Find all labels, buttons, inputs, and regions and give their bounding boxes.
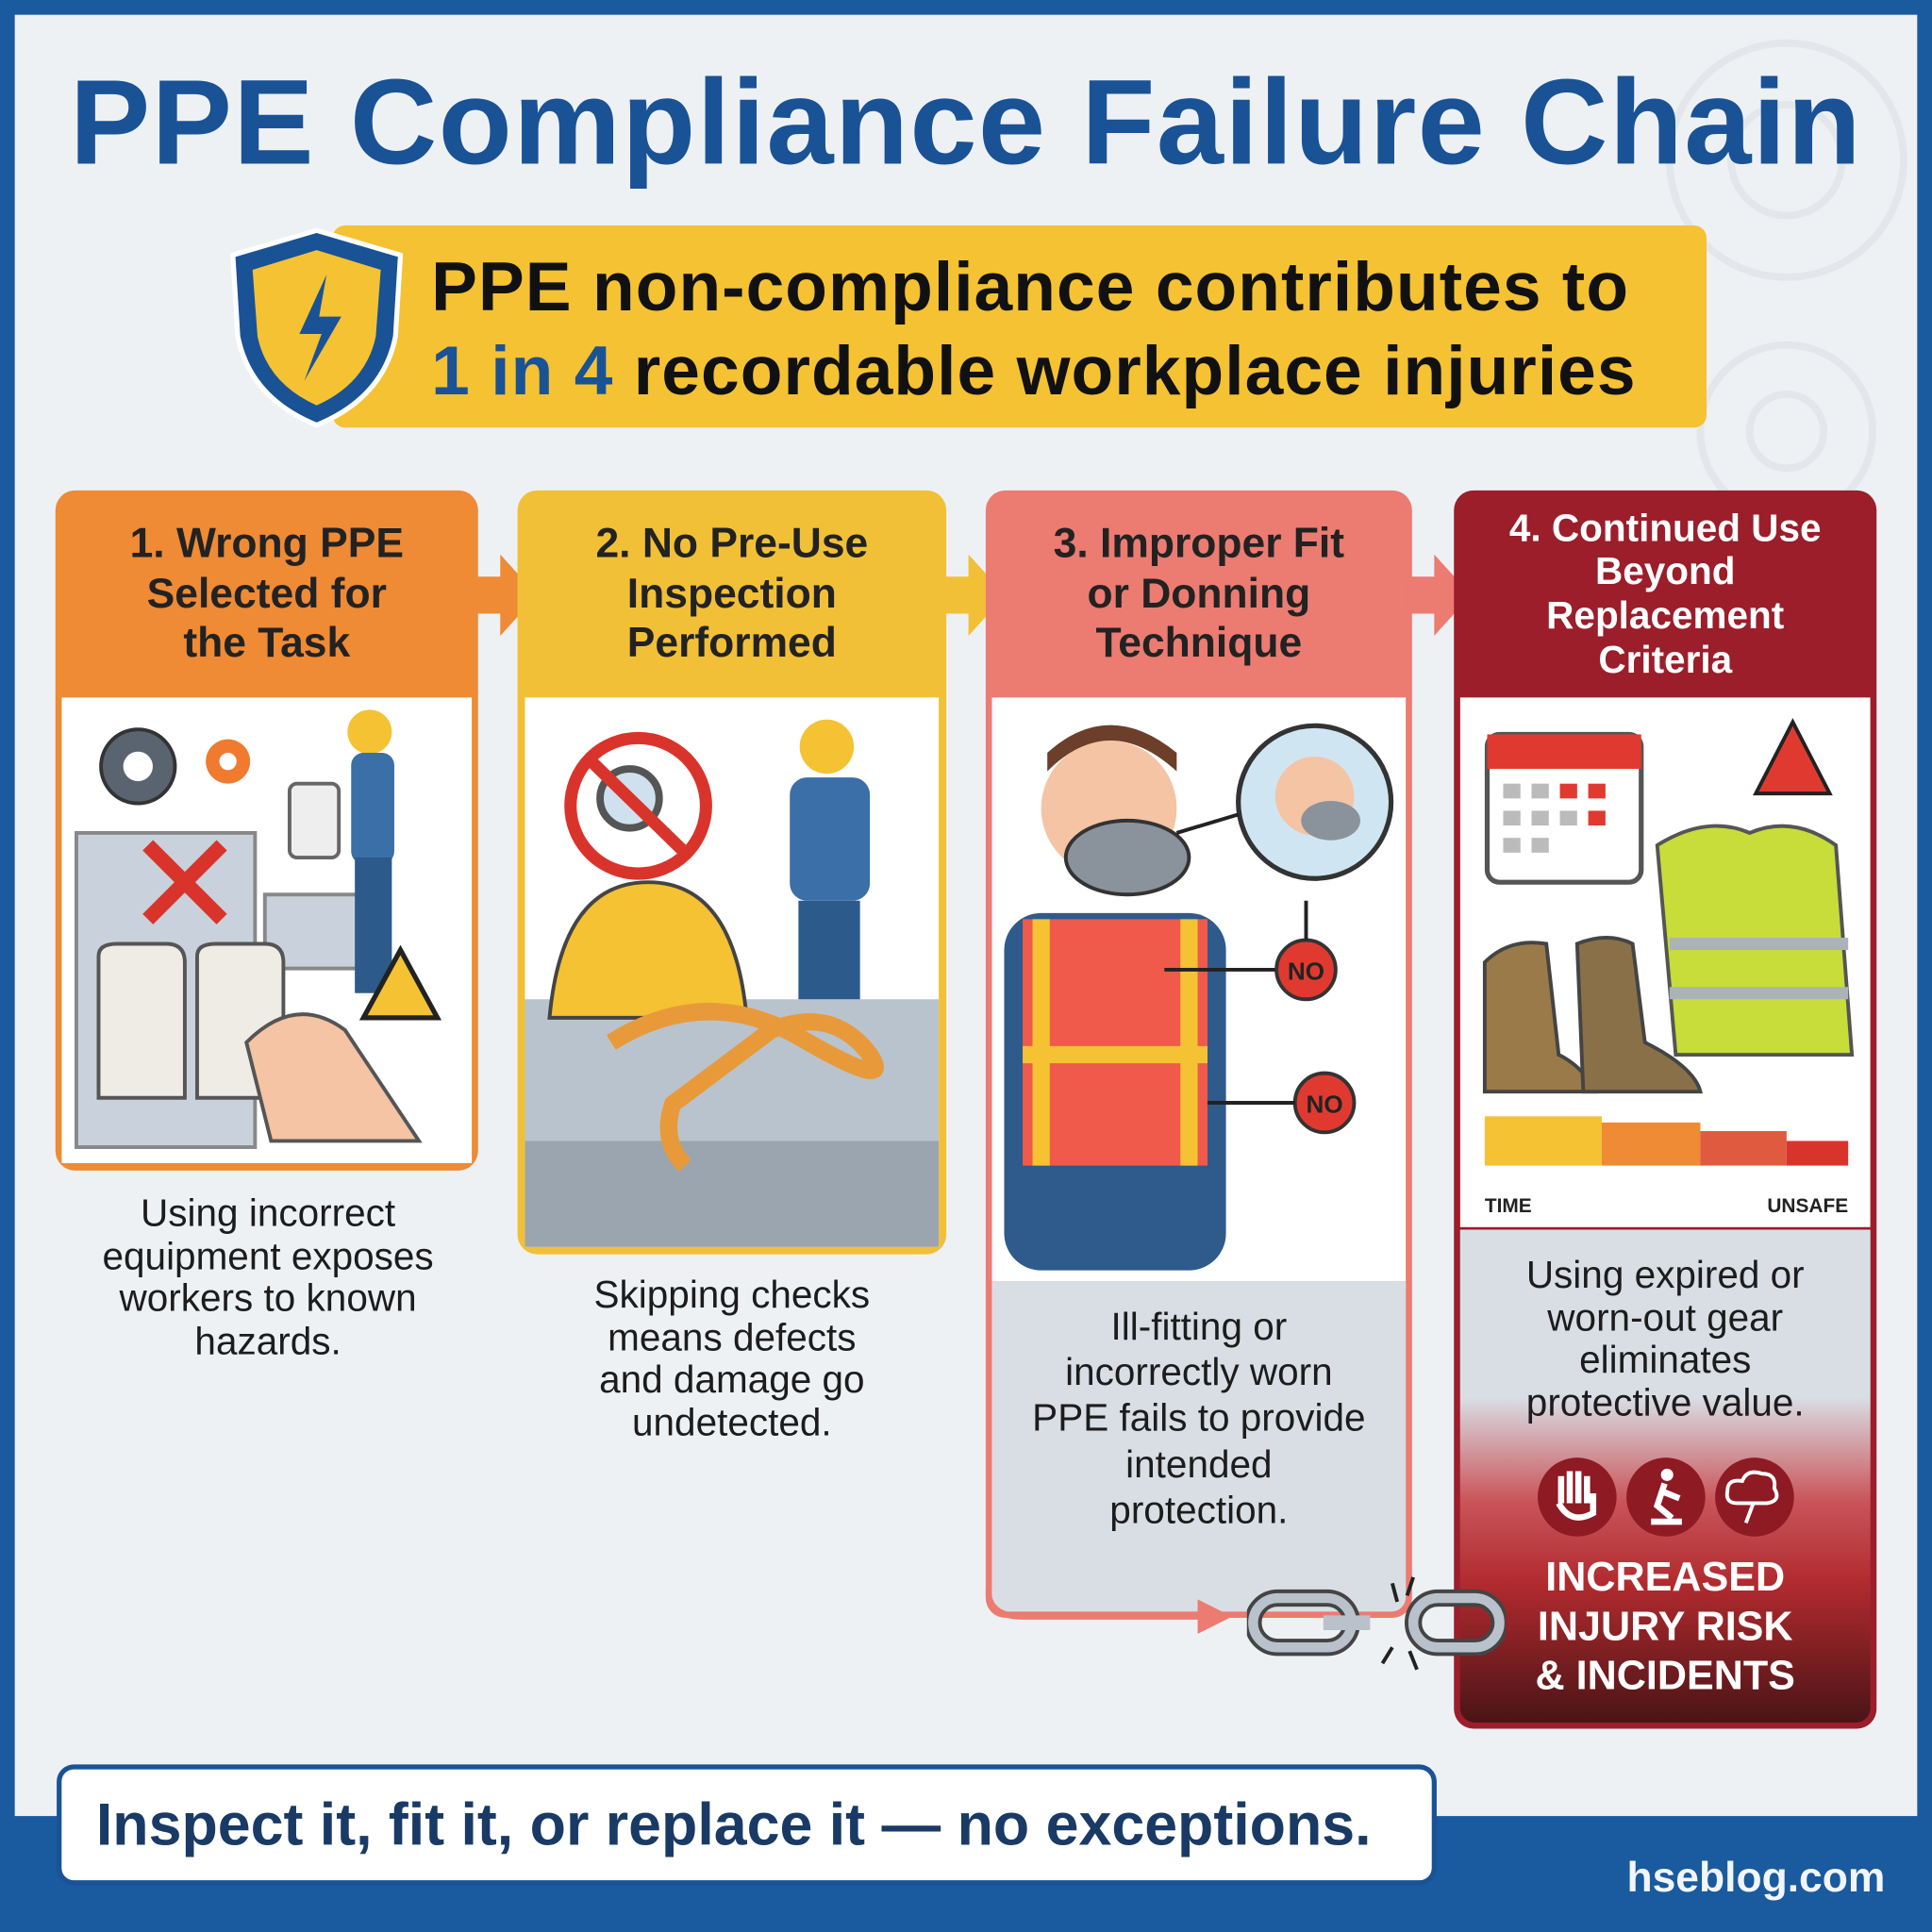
heading 2: Performed (627, 620, 837, 667)
text 3: incorrectly worn (1065, 1351, 1333, 1393)
stat text (431, 248, 1637, 409)
heading 1 (130, 520, 404, 667)
heading 3: 3. Improper Fit (1054, 520, 1344, 567)
text 1: hazards. (194, 1320, 341, 1363)
callout: increased injury risk (1536, 1554, 1795, 1698)
footer band (0, 1816, 1932, 1932)
text 2: means defects (608, 1316, 856, 1358)
heading 1: 1. Wrong PPE (130, 520, 404, 567)
text 1: Using incorrect (141, 1191, 395, 1235)
text 2: and damage go (599, 1358, 865, 1402)
stat text: 1 in 4 recordable workplace injuries (431, 331, 1637, 409)
decorative gears (1666, 40, 1907, 491)
heading 1: the Task (183, 620, 350, 667)
arrow 1 (477, 555, 518, 636)
icon: broken chain (1247, 1576, 1506, 1670)
text 4: protective value. (1526, 1381, 1805, 1424)
heading 4: Beyond (1595, 550, 1735, 593)
text 3: intended (1125, 1442, 1273, 1486)
text 1 (103, 1191, 434, 1363)
brand: hseblog.com (1626, 1855, 1885, 1901)
callout: increased injury risk: & INCIDENTS (1536, 1653, 1795, 1698)
title: PPE Compliance Failure Chain (70, 54, 1862, 190)
text 3: protection. (1109, 1488, 1288, 1531)
text 4: eliminates (1579, 1339, 1751, 1382)
illustration 2 (525, 697, 940, 1247)
panel 2 (517, 491, 947, 1255)
stat text: PPE non-compliance contributes to (431, 248, 1629, 325)
callout: increased injury risk: INJURY RISK (1538, 1603, 1793, 1649)
stat banner (230, 225, 1707, 428)
arrow: to chain (985, 1590, 1230, 1634)
arrow 2 (946, 555, 986, 636)
panel 3 (985, 491, 1412, 1618)
heading 1: Selected for (147, 570, 387, 617)
illustration 4: UNSAFE (1767, 1195, 1848, 1217)
heading 4: 4. Continued Use (1509, 506, 1822, 549)
icons: hazards (1538, 1457, 1794, 1537)
text 4: worn-out gear (1547, 1296, 1783, 1339)
text 1: equipment exposes (103, 1234, 434, 1277)
icon: shield (230, 228, 404, 427)
heading 2: Inspection (627, 570, 837, 617)
heading 4 (1509, 506, 1822, 681)
illustration 4 (1460, 697, 1871, 1227)
illustration 3 (992, 697, 1406, 1281)
text 3 (1032, 1305, 1366, 1531)
callout: increased injury risk: INCREASED (1545, 1554, 1785, 1599)
illustration 1 (61, 697, 472, 1163)
text 3: Ill-fitting or (1110, 1305, 1287, 1348)
tagline: Inspect it, fit it, or replace it — no exceptions. (96, 1792, 1372, 1857)
illustration 3: NO (1288, 957, 1324, 985)
text 2: Skipping checks (594, 1273, 870, 1316)
heading 2: 2. No Pre-Use (595, 520, 868, 567)
heading 4: Replacement (1546, 594, 1784, 637)
panel 4 (1454, 491, 1877, 1728)
heading 3: or Donning (1087, 570, 1310, 617)
illustration 4: TIME (1485, 1195, 1532, 1217)
text 1: workers to known (120, 1277, 417, 1320)
text 4: Using expired or (1526, 1253, 1805, 1296)
panel 1 (55, 491, 478, 1171)
text 3: PPE fails to provide (1032, 1396, 1366, 1440)
arrow 3 (1411, 555, 1455, 636)
tagline (57, 1764, 1437, 1885)
heading 4: Criteria (1598, 638, 1732, 681)
text 2: undetected. (632, 1401, 832, 1444)
text 2 (594, 1273, 870, 1444)
text 4 (1526, 1253, 1805, 1424)
heading 2 (595, 520, 868, 667)
heading 3 (1054, 520, 1344, 667)
illustration 3: NO (1306, 1090, 1343, 1118)
heading 3: Technique (1095, 620, 1302, 667)
